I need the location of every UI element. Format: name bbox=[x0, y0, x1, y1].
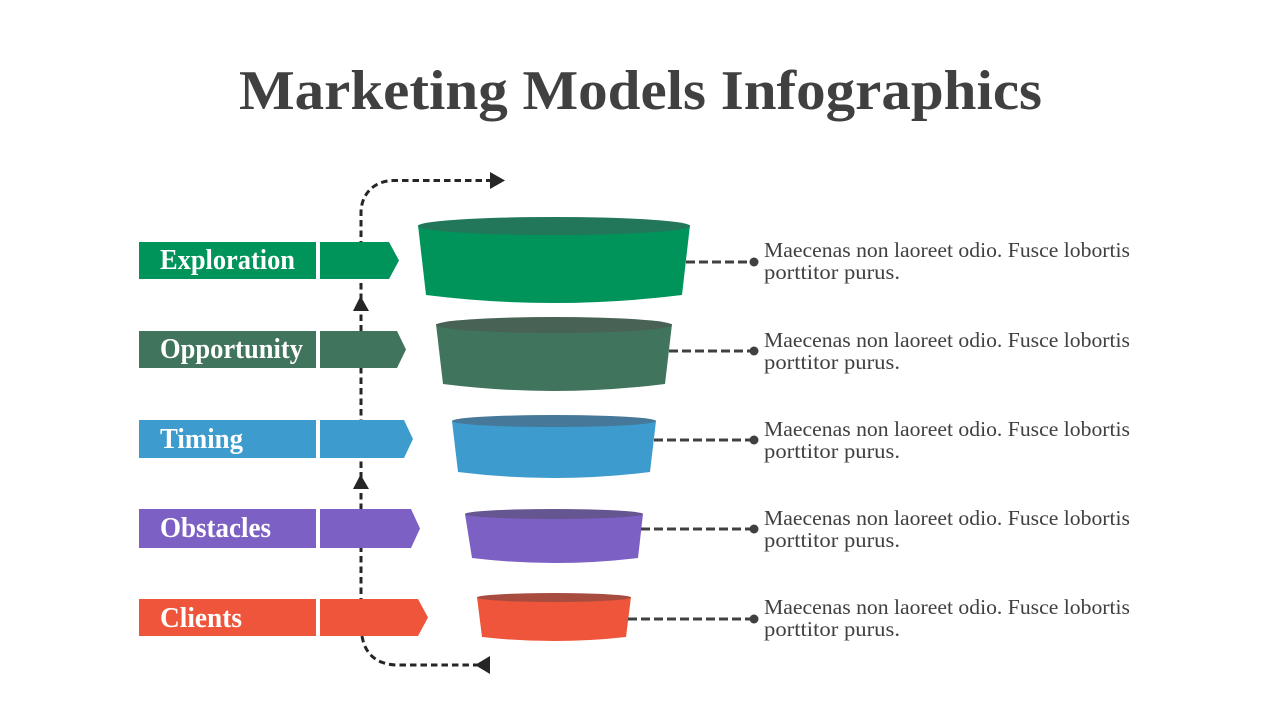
description 3 bbox=[764, 417, 1130, 463]
stage label: Exploration bbox=[139, 242, 399, 279]
funnel tier: red bbox=[477, 593, 631, 641]
description 5: porttitor purus. bbox=[764, 617, 900, 641]
connector 3 bbox=[654, 436, 758, 444]
description 1: porttitor purus. bbox=[764, 260, 900, 284]
description 4: Maecenas non laoreet odio. Fusce lobortis bbox=[764, 506, 1130, 530]
description 4: porttitor purus. bbox=[764, 528, 900, 552]
stage label: Obstacles bbox=[139, 509, 420, 548]
stage label: Exploration: Exploration bbox=[160, 245, 295, 276]
stage label: Opportunity: Opportunity bbox=[160, 334, 303, 365]
stage label: Obstacles: Obstacles bbox=[160, 513, 271, 544]
funnel tier: green bbox=[418, 217, 690, 303]
connector 5 bbox=[628, 614, 758, 624]
connector 4 bbox=[641, 524, 758, 534]
description 3: porttitor purus. bbox=[764, 439, 900, 463]
description 2 bbox=[764, 328, 1130, 374]
description 1: Maecenas non laoreet odio. Fusce lobortis bbox=[764, 238, 1130, 262]
title: Marketing Models Infographics bbox=[239, 60, 1042, 122]
flow arrow: dashed path through the stages bbox=[353, 172, 505, 674]
stage label: Clients: Clients bbox=[160, 603, 242, 634]
description 3: Maecenas non laoreet odio. Fusce lobortis bbox=[764, 417, 1130, 441]
stage label: Clients bbox=[139, 599, 428, 636]
funnel tier: purple bbox=[465, 509, 643, 563]
stage label: Timing: Timing bbox=[160, 424, 243, 455]
description 2: Maecenas non laoreet odio. Fusce lobortis bbox=[764, 328, 1130, 352]
stage label: Opportunity bbox=[139, 331, 406, 368]
funnel tier: blue bbox=[452, 415, 656, 478]
connector 1 bbox=[686, 258, 758, 266]
funnel tier: dark green bbox=[436, 317, 672, 391]
description 5 bbox=[764, 595, 1130, 641]
description 5: Maecenas non laoreet odio. Fusce lobortis bbox=[764, 595, 1130, 619]
connector 2 bbox=[669, 346, 758, 356]
stage label: Timing bbox=[139, 420, 413, 458]
description 1 bbox=[764, 238, 1130, 284]
description 4 bbox=[764, 506, 1130, 552]
description 2: porttitor purus. bbox=[764, 350, 900, 374]
